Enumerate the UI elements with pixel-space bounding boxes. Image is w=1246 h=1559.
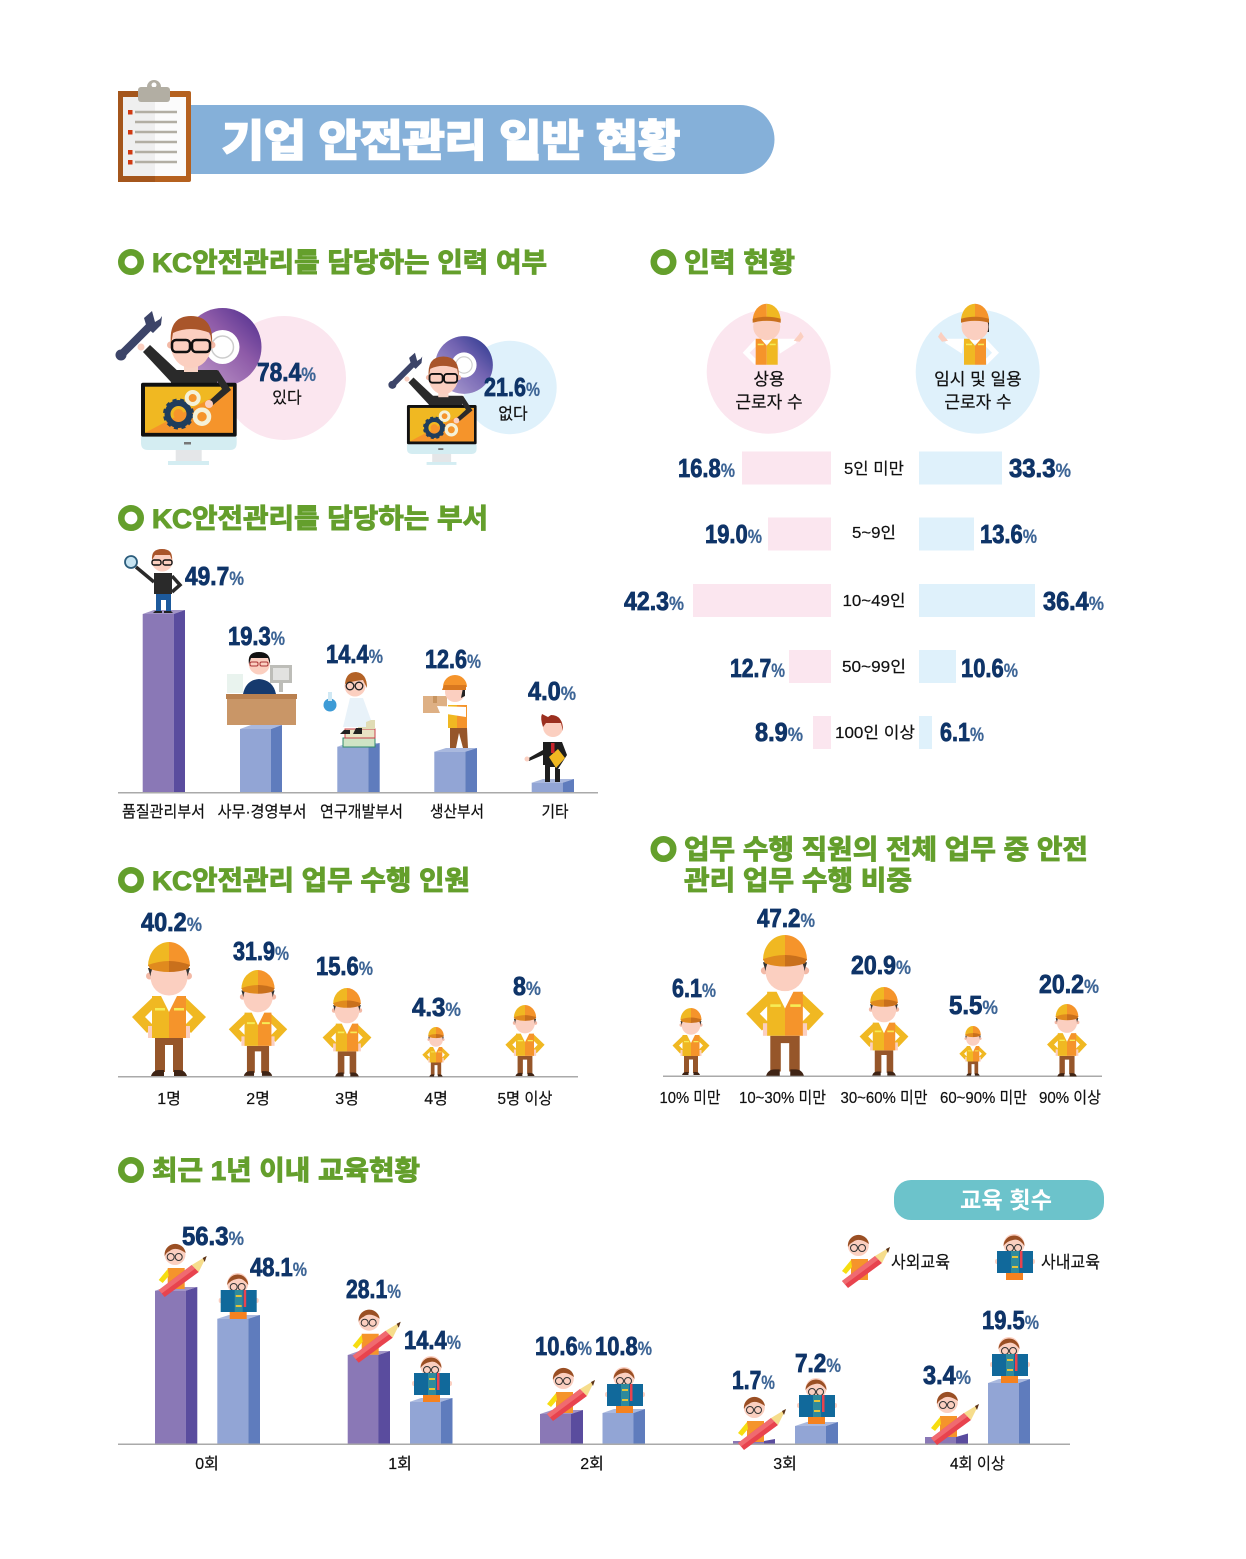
- chart: 안전관리 업무 수행 비중: 90% 이상: [1039, 1089, 1101, 1107]
- panel: 상용 근로자 수: 상용: [753, 370, 785, 389]
- values: 담당 부서: 14.4%: [326, 639, 383, 669]
- heading: 안전관리 업무 수행 비중: 관리 업무 수행 비중: [684, 866, 912, 896]
- chart: 업무 수행 인원: 2명: [246, 1090, 270, 1108]
- 없다 group: [388, 336, 557, 465]
- legend item: 사내교육: [995, 1234, 1100, 1280]
- legend item: 사외교육: 사외교육: [891, 1253, 950, 1272]
- axis labels: 담당 부서: 연구개발부서: [320, 803, 403, 821]
- heading: 업무 수행 인원: KC안전관리 업무 수행 인원: [152, 866, 470, 896]
- panel: 상용 근로자 수: 근로자 수: [735, 393, 803, 412]
- title banner: 기업 안전관리 일반 현황: [222, 118, 680, 166]
- chart: 담당 부서 bars: [118, 549, 598, 794]
- chart: 인력 현황 diverging bars: 19.0%: [705, 519, 762, 549]
- chart: 인력 현황 diverging bars: 42.3%: [624, 586, 684, 616]
- chart: 인력 현황 diverging bars: 36.4%: [1043, 586, 1104, 616]
- chart: 인력 현황 diverging bars: 8.9%: [755, 717, 803, 747]
- chart: 업무 수행 인원: [118, 907, 578, 1108]
- chart: 교육 횟수 bars: 14.4%: [404, 1325, 461, 1355]
- 있다 group: 있다: [272, 389, 302, 407]
- values: 담당 부서: 49.7%: [185, 561, 244, 591]
- chart: 인력 현황 diverging bars: 33.3%: [1009, 453, 1071, 483]
- chart: 안전관리 업무 수행 비중: [660, 903, 1102, 1107]
- chart: 교육 횟수 bars: 10.6%: [535, 1331, 592, 1361]
- figure: office worker at desk: [226, 652, 297, 725]
- chart: 인력 현황 diverging bars: 50~99인: [842, 658, 906, 676]
- axis labels: 담당 부서: 기타: [542, 803, 569, 821]
- figure: inspector with magnifier: [125, 549, 180, 613]
- 있다 group: 78.4%: [257, 357, 316, 387]
- chart: 업무 수행 인원: 15.6%: [316, 951, 373, 981]
- chart: 교육 횟수 bars: 3회: [773, 1455, 797, 1473]
- chart: 업무 수행 인원: 3명: [335, 1090, 359, 1108]
- heading: 담당 부서: KC안전관리를 담당하는 부서: [152, 504, 488, 534]
- chart: 안전관리 업무 수행 비중: 20.9%: [851, 950, 911, 980]
- chart: 교육 횟수 bars: 56.3%: [182, 1221, 244, 1251]
- chart: 교육 횟수 bars: 3.4%: [923, 1360, 971, 1390]
- chart: 안전관리 업무 수행 비중: 5.5%: [949, 990, 998, 1020]
- legend item: 사외교육: [842, 1235, 950, 1288]
- chart: 안전관리 업무 수행 비중: 6.1%: [672, 973, 716, 1003]
- chart: 인력 현황 diverging bars: 6.1%: [940, 717, 984, 747]
- chart: 업무 수행 인원: 8%: [513, 971, 541, 1001]
- chart: 인력 현황 diverging bars: 100인 이상: [835, 724, 915, 742]
- panel: 임시 및 일용 근로자 수: 근로자 수: [944, 393, 1012, 412]
- chart: 업무 수행 인원: 5명 이상: [498, 1090, 553, 1108]
- figure: researcher on books: [324, 672, 375, 747]
- values: 담당 부서: 4.0%: [528, 676, 576, 706]
- heading: 인력 현황: 인력 현황: [684, 248, 795, 278]
- panel: 상용 근로자 수: [707, 304, 831, 434]
- axis labels: 담당 부서: [122, 803, 569, 821]
- chart: 안전관리 업무 수행 비중: 10% 미만: [660, 1089, 721, 1107]
- chart: 안전관리 업무 수행 비중: 10~30% 미만: [739, 1089, 826, 1107]
- figure: manager with folder: [524, 714, 567, 782]
- chart: 인력 현황 diverging bars: 12.7%: [730, 653, 785, 683]
- chart: 교육 횟수 bars: [118, 1221, 1070, 1473]
- chart: 인력 현황 diverging bars: 10~49인: [842, 592, 906, 610]
- chart: 업무 수행 인원: 1명: [157, 1090, 181, 1108]
- chart: 안전관리 업무 수행 비중: 47.2%: [757, 903, 815, 933]
- values: 담당 부서: [185, 561, 576, 706]
- 없다 group: 없다: [498, 405, 528, 423]
- values: 담당 부서: 19.3%: [228, 621, 285, 651]
- chart: 교육 횟수 bars: 1.7%: [732, 1365, 775, 1395]
- heading: 안전관리 업무 수행 비중: [654, 835, 1088, 896]
- panel: 담당 인력 여부: [116, 308, 557, 465]
- chart: 교육 횟수 bars: 1회: [388, 1455, 412, 1473]
- chart: 교육 횟수 bars: 2회: [580, 1455, 604, 1473]
- chart: 교육 횟수 bars: 28.1%: [346, 1274, 401, 1304]
- legend item: 사내교육: 사내교육: [1041, 1253, 1100, 1272]
- chart: 교육 횟수 bars: 48.1%: [250, 1252, 307, 1282]
- heading: 교육현황: 최근 1년 이내 교육현황: [152, 1156, 420, 1186]
- chart: 인력 현황 diverging bars: 5인 미만: [844, 460, 904, 478]
- chart: 인력 현황 diverging bars: 5~9인: [852, 524, 896, 542]
- axis labels: 담당 부서: 품질관리부서: [122, 803, 205, 821]
- 없다 group: 21.6%: [484, 372, 540, 402]
- chart: 인력 현황 diverging bars: 13.6%: [980, 519, 1037, 549]
- chart: 업무 수행 인원: 31.9%: [233, 936, 289, 966]
- clipboard icon: [118, 80, 191, 182]
- axis labels: 담당 부서: 생산부서: [430, 803, 484, 821]
- values: 담당 부서: 12.6%: [425, 644, 481, 674]
- panel: 임시 및 일용 근로자 수: [916, 304, 1040, 434]
- heading: KC 담당 인력 여부: KC안전관리를 담당하는 인력 여부: [152, 248, 547, 278]
- chart: 업무 수행 인원: 40.2%: [141, 907, 202, 937]
- chart: 교육 횟수 bars: 7.2%: [795, 1348, 841, 1378]
- chart: 교육 횟수 bars: 4회 이상: [950, 1455, 1005, 1473]
- chart: 교육 횟수 bars: 19.5%: [982, 1305, 1039, 1335]
- chart: 업무 수행 인원: 4명: [424, 1090, 448, 1108]
- chart: 교육 횟수 bars: 0회: [195, 1455, 219, 1473]
- heading: 안전관리 업무 수행 비중: 업무 수행 직원의 전체 업무 중 안전: [684, 835, 1088, 865]
- figure: worker with box: [423, 675, 468, 748]
- chart: 안전관리 업무 수행 비중: 30~60% 미만: [840, 1089, 928, 1107]
- axis labels: 담당 부서: 사무·경영부서: [218, 803, 306, 821]
- chart: 안전관리 업무 수행 비중: 20.2%: [1039, 969, 1099, 999]
- 있다 group: [116, 308, 346, 465]
- title banner: [191, 105, 774, 174]
- chart: 교육 횟수 bars: 10.8%: [595, 1331, 652, 1361]
- panel: 임시 및 일용 근로자 수: 임시 및 일용: [934, 370, 1022, 389]
- legend: 교육 횟수: 교육 횟수: [960, 1187, 1052, 1213]
- chart: 업무 수행 인원: 4.3%: [412, 992, 461, 1022]
- chart: 인력 현황 diverging bars: 16.8%: [678, 453, 735, 483]
- legend: 교육 횟수: [842, 1180, 1104, 1288]
- chart: 인력 현황 diverging bars: 10.6%: [961, 653, 1018, 683]
- chart: 안전관리 업무 수행 비중: 60~90% 미만: [940, 1089, 1027, 1107]
- chart: 인력 현황 diverging bars: [624, 452, 1104, 749]
